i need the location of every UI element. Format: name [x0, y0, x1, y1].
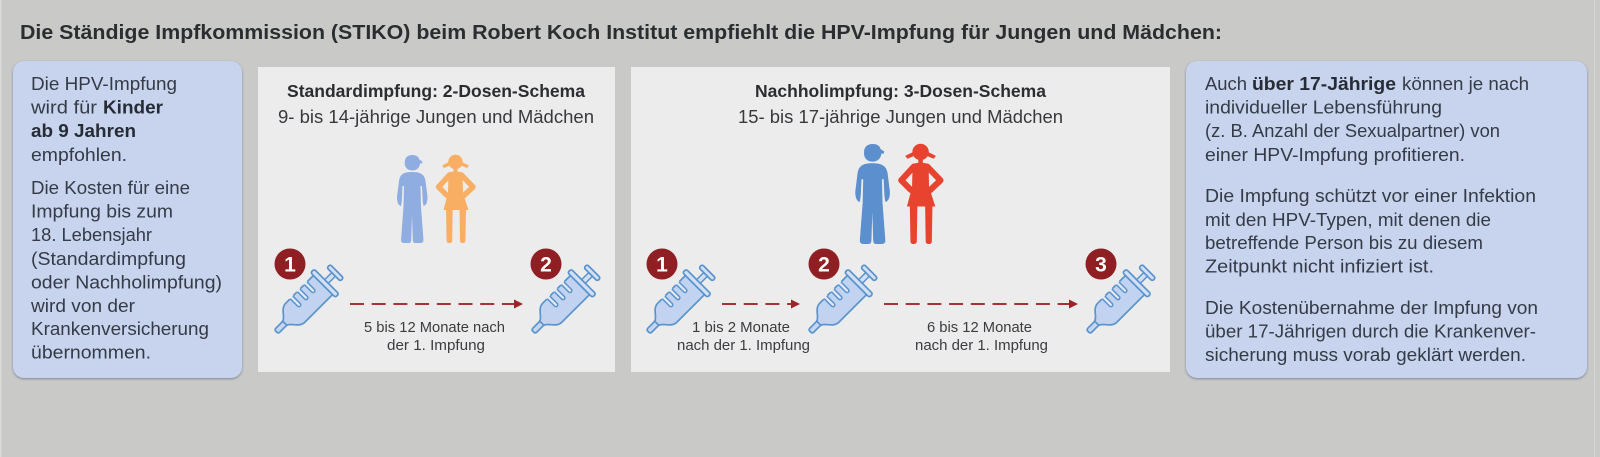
caption: interval 2: 6 bis 12 Monate — [927, 320, 1032, 336]
badge 1 — [274, 248, 306, 280]
panel: Standardimpfung — [258, 67, 615, 372]
panel: right info box — [1186, 61, 1587, 379]
text: cost coverage: Die Kostenübernahme der Impfung von — [1205, 298, 1538, 318]
text: recommendation: Die HPV-Impfung — [31, 74, 177, 94]
text: protection: mit den HPV-Typen, mit denen die — [1205, 210, 1491, 230]
text: recommendation: empfohlen. — [31, 145, 127, 165]
text: protection: Zeitpunkt nicht infiziert ist. — [1205, 256, 1434, 276]
caption: interval: 5 bis 12 Monate nach — [364, 320, 505, 336]
caption: interval 2 — [915, 320, 1048, 354]
icon: syringe 2 — [521, 259, 606, 344]
caption: interval 1: 1 bis 2 Monate — [692, 320, 790, 336]
text: older than 17 — [1205, 74, 1529, 165]
text: costs: oder Nachholimpfung) — [31, 272, 222, 292]
text: recommendation: Kinder — [103, 98, 163, 118]
text: costs: Impfung bis zum — [31, 202, 173, 222]
text: costs: Krankenversicherung — [31, 319, 209, 339]
text: recommendation: wird für — [30, 98, 97, 118]
text: cost coverage: sicherung muss vorab geklärt werden. — [1205, 345, 1526, 365]
text: older than 17: können je nach — [1402, 74, 1529, 94]
icon: syringe 1 — [636, 259, 721, 344]
text: costs: (Standardimpfung — [31, 249, 186, 269]
caption: interval 1 — [677, 320, 810, 354]
text: costs: Die Kosten für eine — [31, 178, 190, 198]
title: Die Ständige Impfkommission (STIKO) beim Robert Koch Institut empfiehlt die HPV-Impfung für Jungen und Mädchen: — [20, 21, 1222, 44]
caption: interval: der 1. Impfung — [387, 338, 485, 354]
text: recommendation: ab 9 Jahren — [31, 121, 136, 141]
caption: interval — [364, 320, 505, 354]
badge 2: 2 — [818, 254, 830, 276]
text: protection: Die Impfung schützt vor einer Infektion — [1205, 186, 1536, 206]
icon: syringe 1 — [264, 259, 349, 344]
panel: left info box — [13, 61, 242, 379]
badge 3 — [1086, 248, 1116, 280]
badge 2 — [808, 248, 840, 280]
badge 2 — [530, 248, 562, 280]
badge 1: 1 — [284, 254, 296, 276]
text: costs: 18. Lebensjahr — [31, 225, 152, 245]
text: cost coverage — [1205, 298, 1538, 365]
subheading: age group: 9- bis 14-jährige Jungen und Mädchen — [278, 107, 594, 127]
arrow: dose 2 to dose 3 — [884, 300, 1078, 308]
badge 2: 2 — [540, 254, 552, 276]
heading: Standardimpfung: Standardimpfung: 2-Dosen-Schema — [287, 81, 585, 101]
heading: Nachholimpfung: Nachholimpfung: 3-Dosen-Schema — [755, 81, 1046, 101]
icon: boy blue — [855, 144, 890, 244]
badge 1 — [646, 248, 678, 280]
text: recommendation — [30, 74, 177, 165]
text: older than 17: einer HPV-Impfung profitieren. — [1205, 145, 1465, 165]
subheading: age group: 15- bis 17-jährige Jungen und Mädchen — [738, 107, 1063, 127]
arrow: dose 1 to dose 2 — [722, 300, 800, 308]
badge 1: 1 — [656, 254, 668, 276]
caption: interval 2: nach der 1. Impfung — [915, 338, 1048, 354]
text: older than 17: über 17-Jährige — [1252, 74, 1396, 94]
arrow: dose 1 to dose 2 — [350, 300, 523, 308]
panel: Nachholimpfung — [631, 67, 1170, 372]
text: cost coverage: über 17-Jährigen durch die Krankenver- — [1205, 322, 1536, 342]
badge 3: 3 — [1095, 254, 1107, 276]
text: older than 17: individueller Lebensführung — [1205, 98, 1442, 118]
icon: girl orange — [438, 155, 473, 243]
icon: girl red — [901, 144, 940, 244]
text: costs: übernommen. — [31, 342, 151, 362]
icon: boy light blue — [397, 155, 428, 243]
text: older than 17: (z. B. Anzahl der Sexualpartner) von — [1205, 121, 1500, 141]
caption: interval 1: nach der 1. Impfung — [677, 338, 810, 354]
text: protection: betreffende Person bis zu diesem — [1205, 233, 1483, 253]
text: protection — [1205, 186, 1536, 276]
text: costs — [30, 178, 222, 362]
text: costs: wird von der — [30, 296, 135, 316]
icon: syringe 3 — [1076, 259, 1161, 344]
text: older than 17: Auch — [1205, 74, 1247, 94]
icon: syringe 2 — [798, 259, 883, 344]
